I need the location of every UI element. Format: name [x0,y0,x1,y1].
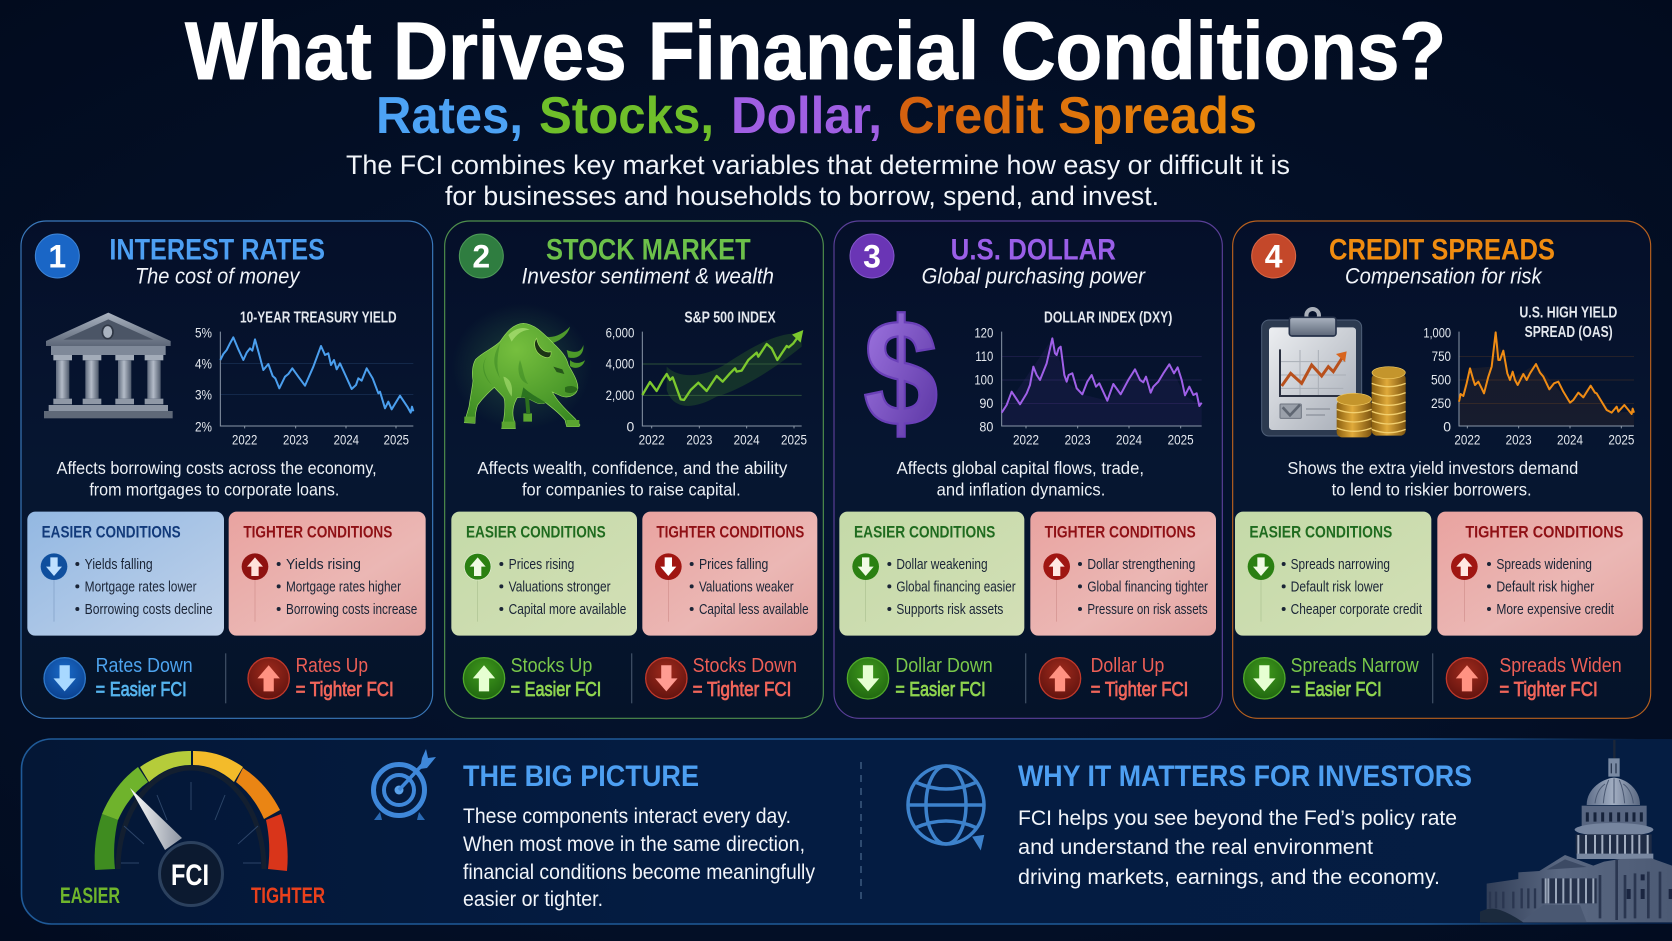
panel: interest rates [21,221,433,718]
tighter conditions box: More expensive credit [1496,602,1614,618]
summary: spreads widen: Spreads Widen [1499,655,1622,677]
easier conditions box [1235,512,1431,636]
summary: spreads narrow [1244,655,1419,701]
number badge 3: 3 [863,238,881,274]
tighter conditions box [1030,512,1216,636]
intro text: The FCI combines key market variables that determine how easy or difficult it is [346,150,1290,180]
summary: stocks down [646,655,797,701]
chart: high yield spread: 2024 [1557,431,1583,447]
chart: 10-year treasury yield: 5% [195,324,212,340]
easier conditions box: Borrowing costs decline [85,602,213,618]
gauge: FCI [60,751,325,908]
summary: rates up [248,655,394,701]
gauge: FCI: EASIER [60,883,120,908]
summary: rates down: Rates Down [96,655,193,677]
tagline: Compensation for risk [1345,263,1543,288]
description: to lend to riskier borrowers. [1332,480,1532,500]
easier conditions box: Global financing easier [896,579,1016,595]
easier conditions box: EASIER CONDITIONS [466,522,606,541]
tighter conditions box: Default risk higher [1496,579,1594,595]
summary: rates down: = Easier FCI [96,679,187,701]
icon: bank building [44,313,173,418]
easier conditions box: Capital more available [509,602,626,618]
chart: 10-year treasury yield: 2022 [232,431,257,447]
text: the big picture [463,760,815,911]
summary: dollar down [847,655,993,701]
chart: dollar index: 80 [979,418,994,434]
chart: high yield spread: 250 [1431,395,1451,411]
description [1287,458,1578,500]
tighter conditions box: Dollar strengthening [1087,557,1195,573]
easier conditions box: Prices rising [509,557,574,573]
summary: spreads widen [1446,655,1622,701]
gauge: FCI: TIGHTER [251,883,325,908]
chart: high yield spread: 1,000 [1423,324,1451,340]
chart: dollar index: 110 [975,348,994,364]
description: and inflation dynamics. [937,480,1105,500]
text: the big picture: When most move in the same direction, [463,832,805,856]
summary: rates down [44,655,193,701]
heading: INTEREST RATES [109,233,325,266]
chart: S&P 500 index: 2022 [639,431,665,447]
chart: S&P 500 index: S&P 500 INDEX [684,310,776,327]
number badge 3 [850,234,894,278]
text: why it matters: driving markets, earnings, and the economy. [1018,865,1440,889]
chart: dollar index: DOLLAR INDEX (DXY) [1044,310,1172,327]
chart: 10-year treasury yield: 2% [195,418,212,434]
icon: clipboard and coins [1262,309,1406,437]
chart: high yield spread [1423,305,1635,447]
tagline: Global purchasing power [922,263,1147,288]
chart: S&P 500 index: 6,000 [606,324,635,340]
summary: dollar up [1039,655,1188,701]
text: why it matters: and understand the real environment [1018,835,1373,859]
chart: dollar index: 2023 [1065,431,1091,447]
tighter conditions box: Spreads widening [1496,557,1592,573]
easier conditions box: Default risk lower [1291,579,1383,595]
easier conditions box: Spreads narrowing [1291,557,1390,573]
chart: S&P 500 index: 2023 [686,431,713,447]
tighter conditions box: Capital less available [699,602,809,618]
subtitle [376,87,1257,145]
chart: dollar index: 100 [974,372,994,388]
chart: dollar index: 90 [979,395,994,411]
heading: U.S. DOLLAR [951,233,1116,266]
number badge 2 [459,234,503,278]
description [897,458,1144,500]
panel: credit spreads [1233,221,1651,718]
summary: spreads widen: = Tighter FCI [1499,679,1598,701]
chart: dollar index [974,310,1202,447]
easier conditions box [27,512,224,636]
tighter conditions box: Borrowing costs increase [286,602,417,618]
description: Shows the extra yield investors demand [1287,458,1578,478]
chart: 10-year treasury yield: 2023 [283,431,308,447]
subtitle: Stocks, [539,87,714,145]
chart: S&P 500 index: 0 [627,418,635,434]
chart: high yield spread: 2022 [1454,431,1481,447]
number badge 1 [35,234,79,278]
panel: U.S. dollar [834,221,1222,718]
text: the big picture: financial conditions become meaningfully [463,860,815,884]
easier conditions box [451,512,637,636]
summary: rates up: Rates Up [296,655,368,677]
chart: high yield spread: U.S. HIGH YIELD [1519,305,1617,322]
chart: high yield spread: 500 [1431,372,1451,388]
tighter conditions box: TIGHTER CONDITIONS [1045,522,1196,541]
summary: dollar down: = Easier FCI [895,679,986,701]
summary: dollar up: Dollar Up [1091,655,1164,677]
heading: CREDIT SPREADS [1329,233,1555,266]
subtitle: Credit Spreads [898,87,1257,145]
tagline: The cost of money [135,263,301,288]
easier conditions box: Supports risk assets [896,602,1003,618]
tighter conditions box: TIGHTER CONDITIONS [243,522,392,541]
tighter conditions box: TIGHTER CONDITIONS [656,522,804,541]
chart: dollar index: 2024 [1116,431,1142,447]
chart: 10-year treasury yield: 3% [195,387,212,403]
description [477,458,788,500]
chart: S&P 500 index [606,310,807,447]
summary: stocks up [463,655,601,701]
chart: S&P 500 index: 2025 [781,431,807,447]
text: why it matters [1018,760,1472,889]
chart: dollar index: 2025 [1168,431,1194,447]
heading: STOCK MARKET [546,233,751,266]
tighter conditions box: TIGHTER CONDITIONS [1465,522,1623,541]
number badge 2: 2 [472,238,490,274]
chart: S&P 500 index: 2,000 [606,387,635,403]
chart: 10-year treasury yield: 2024 [334,431,359,447]
chart: high yield spread: 0 [1443,418,1451,434]
tighter conditions box [1437,512,1643,636]
easier conditions box: Valuations stronger [509,579,611,595]
tighter conditions box: Global financing tighter [1087,579,1208,595]
text: the big picture: These components interact every day. [463,804,791,828]
number badge 4 [1252,234,1296,278]
description [57,458,377,500]
easier conditions box: Yields falling [85,557,153,573]
chart: 10-year treasury yield: 10-YEAR TREASURY YIELD [240,310,397,327]
summary: spreads narrow: Spreads Narrow [1291,655,1419,677]
summary: stocks up: = Easier FCI [511,679,601,701]
chart: dollar index: 120 [974,324,994,340]
description: for companies to raise capital. [522,480,741,500]
tighter conditions box: Pressure on risk assets [1087,602,1208,618]
chart: high yield spread: 750 [1432,348,1451,364]
tagline: Investor sentiment & wealth [522,263,774,288]
text: the big picture: easier or tighter. [463,887,603,911]
easier conditions box: EASIER CONDITIONS [854,522,995,541]
description: Affects wealth, confidence, and the ability [477,458,788,478]
chart: high yield spread: SPREAD (OAS) [1525,324,1613,341]
number badge 1: 1 [48,238,66,274]
gauge: FCI: FCI [171,859,209,892]
chart: 10-year treasury yield [195,310,413,447]
summary: stocks down: = Tighter FCI [693,679,791,701]
icon: target [374,749,436,820]
intro text: for businesses and households to borrow, spend, and invest. [445,181,1159,211]
chart: high yield spread: 2025 [1608,431,1635,447]
icon: dollar sign: $ [863,288,938,458]
icon: globe [908,766,984,846]
tighter conditions box: Yields rising [286,557,361,573]
summary: stocks up: Stocks Up [511,655,592,677]
chart: 10-year treasury yield: 4% [195,356,212,372]
subtitle: Rates, [376,87,523,145]
description: Affects global capital flows, trade, [897,458,1144,478]
number badge 4: 4 [1265,238,1283,274]
description: Affects borrowing costs across the economy, [57,458,377,478]
tighter conditions box: Valuations weaker [699,579,794,595]
icon: bull [452,303,592,430]
text: why it matters: WHY IT MATTERS FOR INVESTORS [1018,760,1472,793]
title: What Drives Financial Conditions? [185,6,1446,97]
summary: stocks down: Stocks Down [693,655,797,677]
summary: rates up: = Tighter FCI [296,679,394,701]
tighter conditions box [229,512,426,636]
easier conditions box [839,512,1024,636]
easier conditions box: Cheaper corporate credit [1291,602,1422,618]
summary: dollar up: = Tighter FCI [1091,679,1188,701]
chart: S&P 500 index: 2024 [734,431,760,447]
summary: spreads narrow: = Easier FCI [1291,679,1382,701]
easier conditions box: Mortgage rates lower [85,579,197,595]
text: the big picture: THE BIG PICTURE [463,760,699,793]
description: from mortgages to corporate loans. [89,480,339,500]
panel: stock market [445,221,823,718]
chart: dollar index: 2022 [1013,431,1039,447]
illustration: capitol building [1480,740,1672,922]
summary: dollar down: Dollar Down [895,655,993,677]
tighter conditions box [642,512,817,636]
easier conditions box: EASIER CONDITIONS [1249,522,1392,541]
text: why it matters: FCI helps you see beyond the Fed’s policy rate [1018,806,1457,830]
easier conditions box: Dollar weakening [896,557,988,573]
chart: 10-year treasury yield: 2025 [384,431,409,447]
easier conditions box: EASIER CONDITIONS [42,522,181,541]
chart: S&P 500 index: 4,000 [606,356,635,372]
subtitle: Dollar, [731,87,882,145]
tighter conditions box: Mortgage rates higher [286,579,401,595]
panel: bottom summary band [22,739,1672,924]
tighter conditions box: Prices falling [699,557,768,573]
intro text [346,150,1290,211]
chart: high yield spread: 2023 [1506,431,1532,447]
